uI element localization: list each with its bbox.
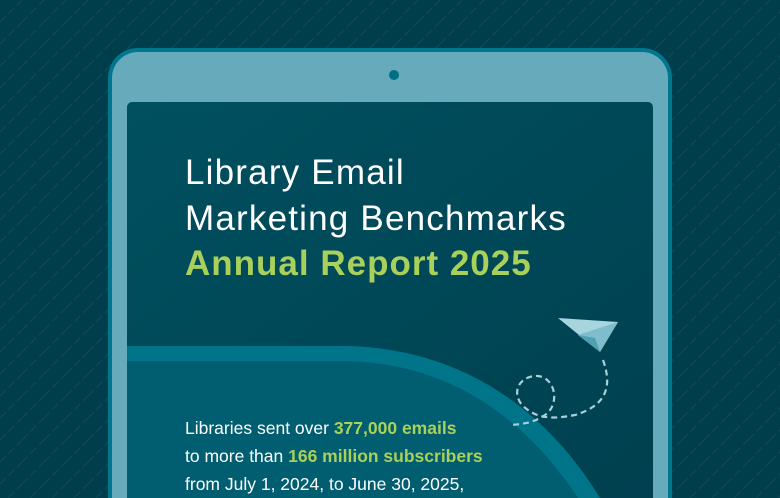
camera: [389, 70, 399, 80]
body text: Libraries sent over 377,000 emails: [185, 418, 456, 438]
body text: from July 1, 2024, to June 30, 2025,: [185, 474, 464, 494]
screen: [127, 102, 653, 498]
text: Marketing Benchmarks: [185, 199, 567, 238]
body text: to more than 166 million subscribers: [185, 446, 483, 466]
curved band: [127, 346, 600, 498]
subtitle: Annual Report 2025: [185, 244, 532, 283]
body text: [185, 418, 483, 494]
paper plane icon: [510, 318, 618, 425]
title: [185, 153, 567, 283]
text: Library Email: [185, 153, 405, 192]
